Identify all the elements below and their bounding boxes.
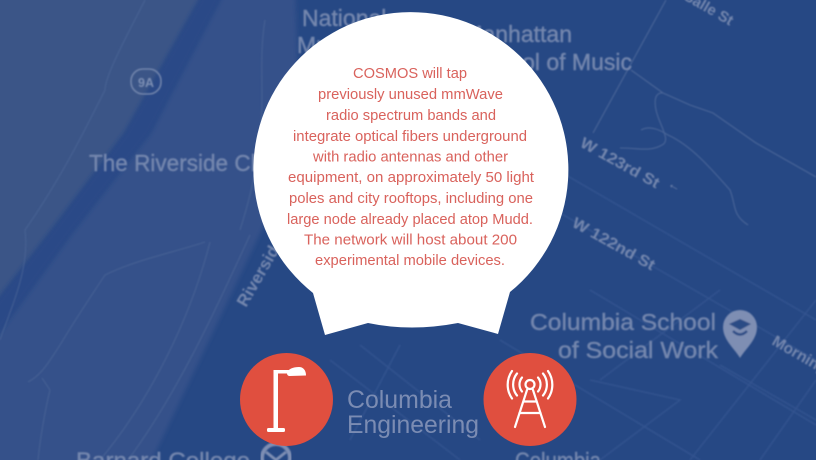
bubble text: previously unused mmWave [318, 86, 503, 103]
map: streets and paths [593, 0, 816, 225]
map: highway strip [0, 0, 225, 345]
map: school pin icon [723, 310, 757, 358]
bubble text: The network will host about 200 [304, 232, 517, 248]
logo: Columbia Engineering: Engineering [347, 411, 479, 439]
map: faint street grid [330, 160, 816, 460]
map: college pin icon [262, 444, 290, 460]
speech bubble [253, 12, 568, 335]
map: labels: Riverside Dr [233, 213, 300, 310]
bubble text: poles and city rooftops, including one [289, 190, 533, 207]
bubble text [287, 65, 535, 269]
bubble text: experimental mobile devices. [315, 252, 505, 269]
map: labels: Manhattan [463, 21, 572, 47]
bubble text: large node already placed atop Mudd. [287, 211, 533, 228]
map: labels: ← [666, 176, 684, 195]
map: labels: W 123rd St [577, 135, 662, 192]
map: highway 9A shield: 9A [138, 76, 154, 90]
map: labels: The Riverside Church [89, 150, 307, 176]
map: labels: National [302, 5, 386, 31]
bubble text: with radio antennas and other [312, 148, 508, 166]
logo: Columbia Engineering: Columbia [347, 386, 452, 414]
logo: Columbia Engineering [347, 386, 479, 439]
bubble text: equipment, on approximately 50 light [288, 169, 535, 186]
bubble text: radio spectrum bands and [326, 107, 496, 124]
map: labels: Columbia School [530, 309, 716, 335]
map: park paths [0, 0, 265, 460]
map: riverside park [0, 0, 300, 460]
map: highway 9A shield [131, 69, 161, 94]
map: labels: School of Music [470, 49, 632, 75]
map: labels: of Social Work [558, 337, 718, 363]
bubble text: integrate optical fibers underground [293, 128, 527, 145]
map: labels: W 122nd St [569, 215, 658, 274]
icon: radio tower [484, 353, 576, 446]
map: labels: Museum [297, 32, 385, 58]
map: river area [0, 0, 205, 310]
icon: street lamp [240, 353, 333, 446]
bubble text: COSMOS will tap [353, 65, 467, 82]
